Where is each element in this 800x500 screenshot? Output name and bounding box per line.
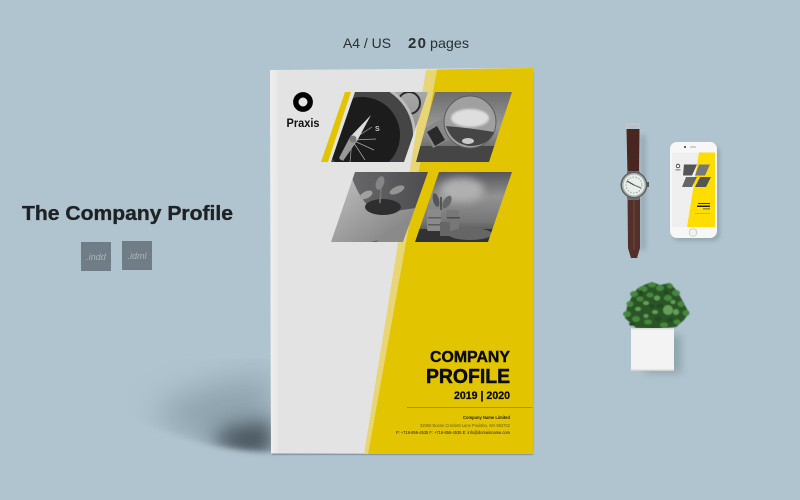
phone screen bbox=[672, 152, 715, 227]
cover text block: PROFILE bbox=[426, 365, 510, 388]
smartphone bbox=[670, 142, 720, 241]
heading: format and page count: 20 bbox=[408, 35, 426, 52]
logo bbox=[286, 95, 320, 130]
cover contact details: P: +716-856-4535 F: +716-856-4535 E: info@domainname.com bbox=[396, 430, 510, 436]
book edge shadows bbox=[272, 72, 534, 455]
cover text block: COMPANY bbox=[430, 349, 511, 366]
cover contact details bbox=[396, 415, 510, 436]
badge: indd: .indd bbox=[86, 252, 107, 262]
badge: idml: .idml bbox=[127, 251, 147, 261]
pot bbox=[631, 328, 674, 371]
book cover bbox=[270, 68, 533, 454]
photo: compass: S bbox=[375, 126, 380, 133]
watch shadow bbox=[640, 135, 646, 250]
title: The Company Profile bbox=[22, 203, 233, 225]
heading: format and page count: pages bbox=[430, 35, 469, 51]
upper strap bbox=[626, 129, 640, 174]
photo: light bulb bbox=[415, 92, 515, 162]
cover contact details: 32950 Boone Crockett Lane Poulsbo, WA 983702 bbox=[420, 423, 510, 429]
cover divider bbox=[407, 407, 532, 408]
cover base bbox=[270, 68, 533, 454]
cover text block bbox=[426, 349, 511, 402]
cover contact details: Company Name Limited bbox=[463, 415, 510, 421]
lower strap bbox=[628, 195, 640, 258]
yellow accent stripe bbox=[321, 92, 351, 162]
plant bbox=[623, 282, 690, 373]
yellow panel bbox=[368, 68, 533, 454]
book shadow bbox=[150, 375, 272, 456]
heading: format and page count: A4 / US bbox=[343, 35, 391, 51]
translucent yellow band bbox=[364, 70, 437, 454]
photo: hands with seedling bbox=[330, 172, 430, 244]
cover text block: 2019 | 2020 bbox=[454, 390, 510, 402]
badge: indd bbox=[81, 242, 111, 271]
photo: compass bbox=[331, 92, 428, 162]
heading: format and page count bbox=[343, 35, 469, 52]
buckle bbox=[627, 124, 640, 131]
watch case bbox=[627, 171, 640, 200]
pot shadow bbox=[645, 335, 681, 373]
spine bbox=[270, 70, 280, 454]
foliage bbox=[623, 282, 690, 329]
watch bbox=[620, 124, 649, 258]
badge: idml bbox=[122, 241, 152, 270]
photo: coins with sprout bbox=[414, 172, 514, 242]
logo: Praxis bbox=[286, 118, 320, 130]
